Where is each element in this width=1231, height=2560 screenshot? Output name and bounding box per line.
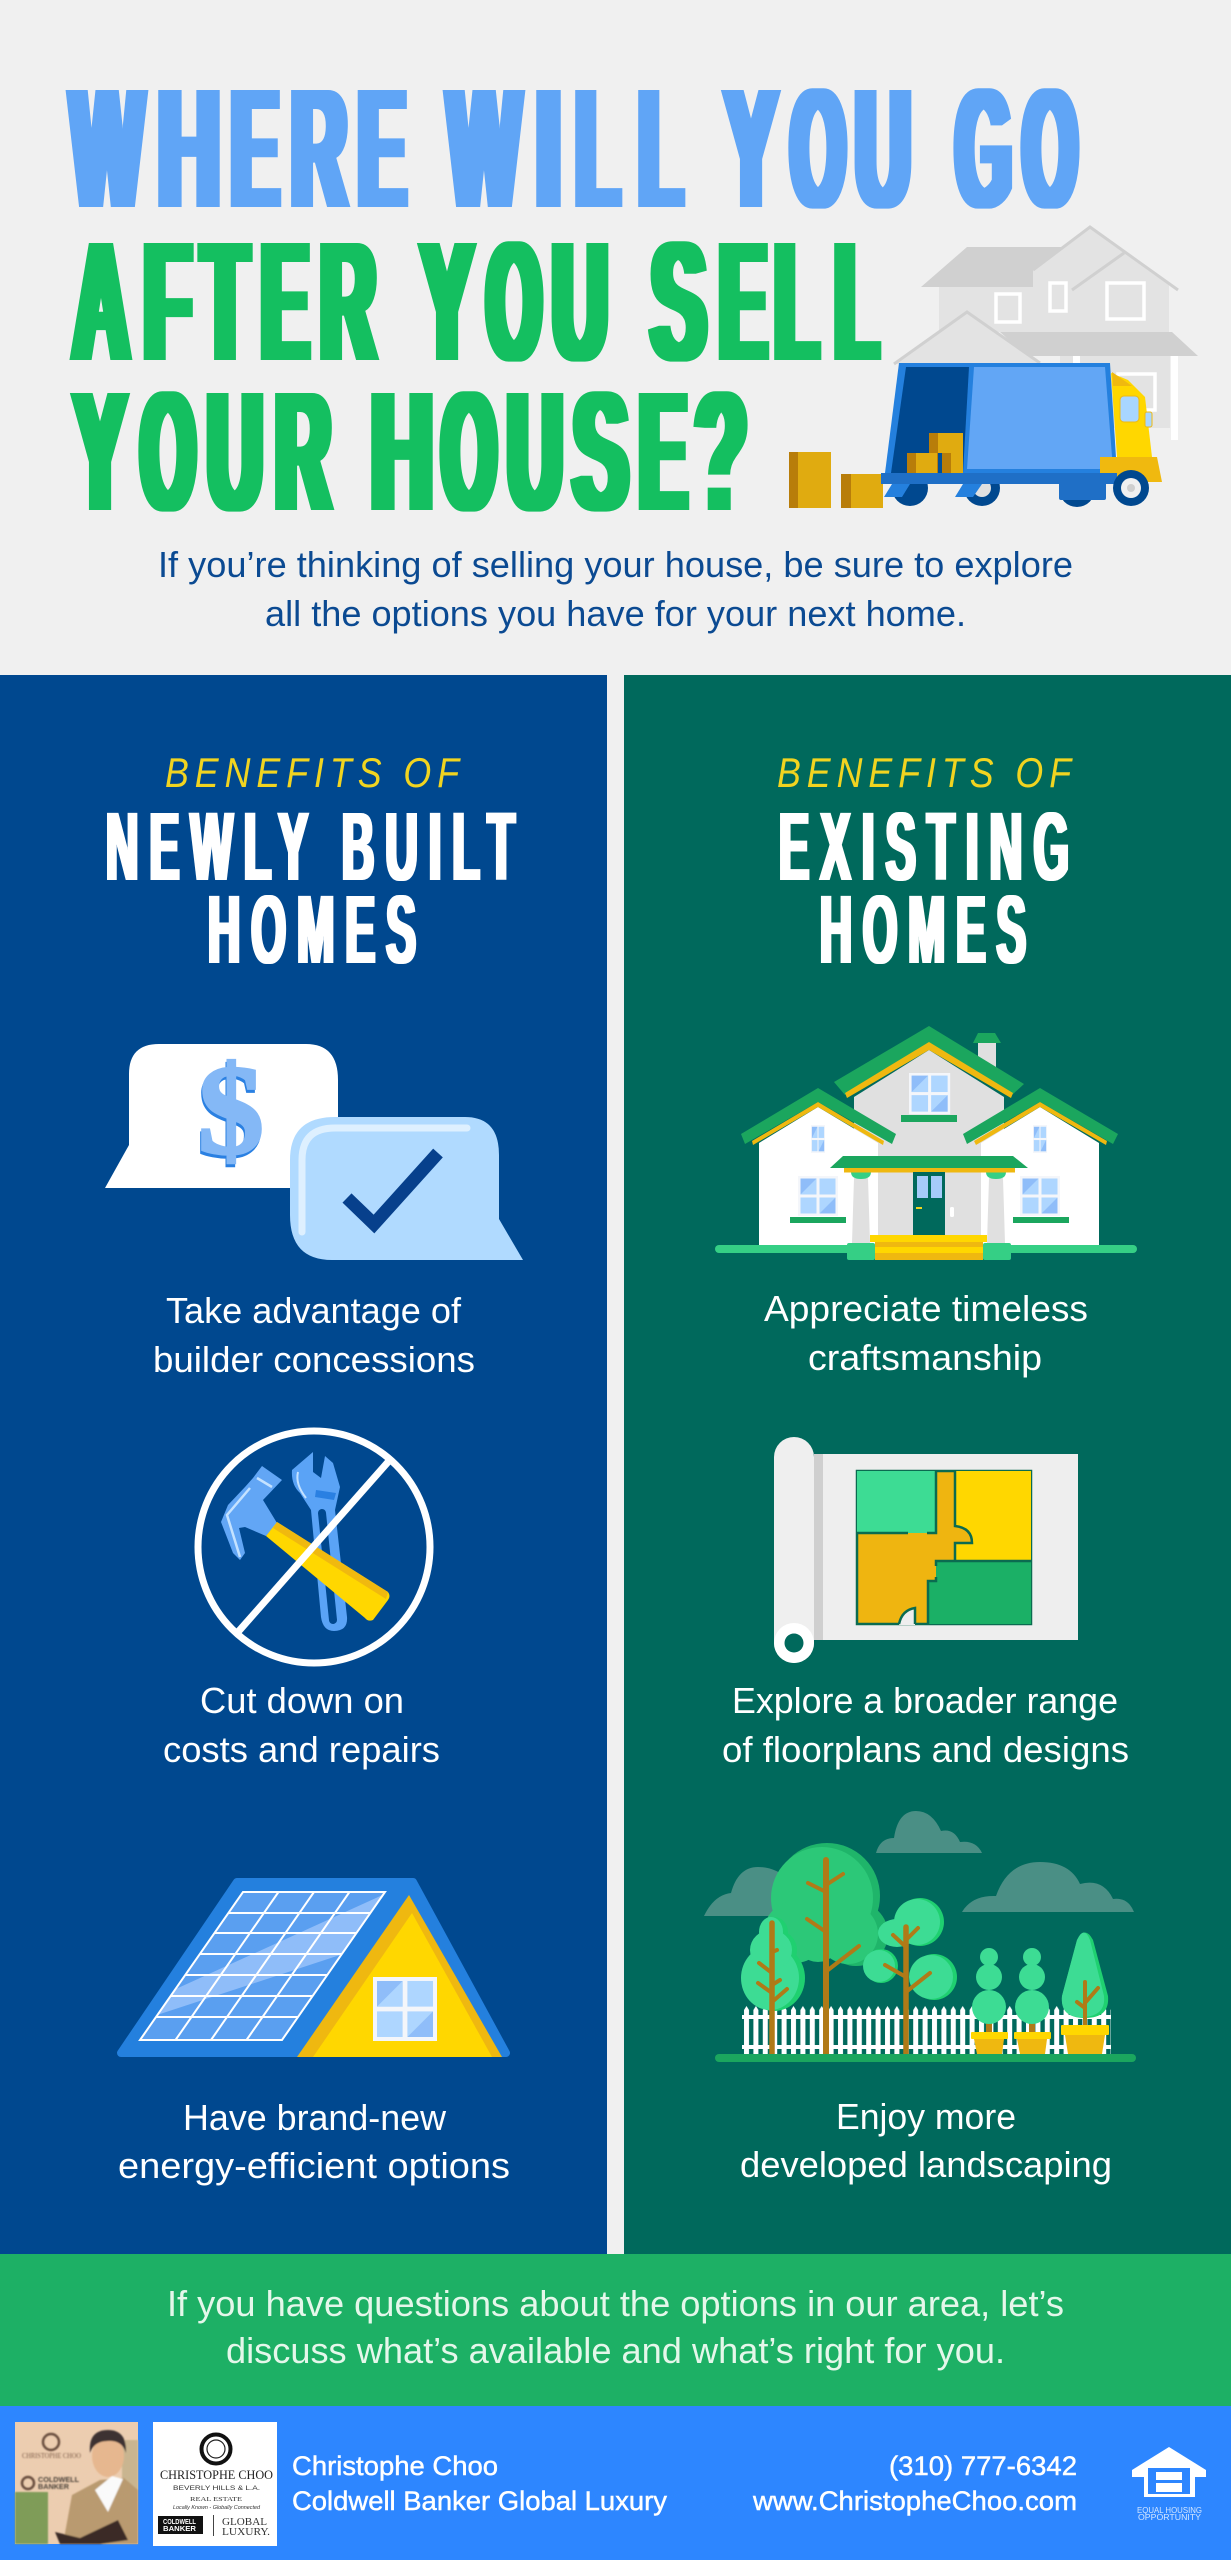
caption: developed landscaping: developed landscaping — [740, 2144, 1112, 2185]
loose moving boxes — [789, 452, 883, 508]
title line 3: O — [141, 357, 195, 547]
background house — [894, 227, 1198, 440]
title line 1: E — [232, 54, 278, 244]
agent logo card: Locally Known - Globally Connected — [173, 2505, 261, 2511]
title line 3: U — [208, 357, 262, 547]
title line 1: G — [956, 54, 1011, 244]
title line 2: A — [73, 207, 129, 397]
panel: newly built homes — [0, 675, 607, 2254]
title line 3: R — [276, 357, 330, 547]
agent photo — [15, 2422, 138, 2544]
phone and website: (310) 777-6342 — [889, 2451, 1077, 2481]
title line 1: R — [292, 54, 346, 244]
caption: timeless craftsmanship: Appreciate timeless — [764, 1288, 1088, 1329]
agent name and company — [292, 2451, 668, 2516]
title — [71, 54, 1077, 547]
icon: landscaped garden — [704, 1811, 1136, 2062]
panel heading: existing: BENEFITS OF — [777, 749, 1077, 796]
icon: floorplan blueprint — [774, 1437, 1078, 1663]
icon: equal housing opportunity: EQUAL HOUSING — [1137, 2505, 1202, 2515]
illustration: moving truck in front of house — [789, 227, 1198, 508]
panel heading: existing — [777, 749, 1080, 984]
title line 2: E — [720, 207, 766, 397]
intro text: If you’re thinking of selling your house, be sure to explore — [158, 544, 1073, 585]
icon: craftsman house — [715, 1026, 1137, 1260]
title line 2: R — [320, 207, 376, 397]
agent logo card — [153, 2422, 277, 2546]
panel: existing homes — [624, 675, 1231, 2254]
truck — [881, 363, 1162, 507]
panel heading: newly built: BENEFITS OF — [165, 749, 465, 796]
title line 1: U — [856, 54, 910, 244]
title line 1: L — [576, 54, 619, 244]
title line 1: H — [158, 54, 220, 244]
potted topiaries — [971, 1932, 1109, 2054]
caption: costs and repairs — [163, 1680, 440, 1770]
title line 1: Y — [725, 54, 777, 244]
caption: floorplans and designs — [722, 1680, 1129, 1770]
agent name and company: Coldwell Banker Global Luxury — [292, 2486, 668, 2516]
title line 3: H — [371, 357, 433, 547]
clouds — [704, 1811, 1134, 1916]
call to action band: If you have questions about the options in our area, let’s — [167, 2283, 1064, 2324]
caption: timeless craftsmanship: craftsmanship — [808, 1337, 1042, 1378]
panel heading: newly built — [106, 749, 526, 984]
call to action band: discuss what’s available and what’s right for you. — [226, 2330, 1005, 2371]
text: O — [1023, 54, 1077, 244]
title line 3 — [74, 357, 747, 547]
middle tree canopy — [863, 1898, 957, 2000]
title line 2: F — [144, 207, 191, 397]
panel: newly built homes: NEWLY BUILT — [106, 792, 526, 901]
icon: speech bubbles with dollar and check: $ — [198, 1039, 264, 1181]
caption: costs and repairs: costs and repairs — [163, 1729, 440, 1770]
panel heading: newly built: HOMES — [208, 875, 427, 984]
caption: floorplans and designs: Explore a broader range — [732, 1680, 1118, 1721]
icon: solar panel roof — [121, 1882, 506, 2057]
call to action band — [0, 2254, 1231, 2406]
title line 2: O — [487, 207, 541, 397]
title line 3: O — [442, 357, 496, 547]
left tree canopy — [741, 1917, 805, 2011]
agent name and company: Christophe Choo — [292, 2451, 498, 2481]
agent logo card: REAL ESTATE — [190, 2496, 242, 2503]
title line 2: S — [651, 207, 706, 397]
title line 2: Y — [421, 207, 473, 397]
caption: floorplans and designs: of floorplans and designs — [722, 1729, 1129, 1770]
caption: energy-efficient options: Have brand-new — [183, 2097, 447, 2138]
agent logo card: BEVERLY HILLS & L.A. — [173, 2485, 260, 2492]
title line 1: I — [536, 54, 562, 244]
title line 3: S — [573, 357, 628, 547]
title line 2: T — [202, 207, 248, 397]
title line 3: U — [508, 357, 562, 547]
agent logo card: CHRISTOPHE CHOO — [160, 2467, 273, 2482]
icon: equal housing opportunity — [1132, 2447, 1206, 2522]
title line 2 — [73, 207, 878, 397]
agent logo card: LUXURY. — [222, 2526, 270, 2538]
caption: builder concessions — [153, 1290, 475, 1380]
title line 3: E — [640, 357, 686, 547]
caption: timeless craftsmanship — [764, 1288, 1088, 1378]
phone and website: www.ChristopheChoo.com — [752, 2486, 1077, 2516]
footer bar — [0, 2406, 1231, 2560]
title line 2: U — [552, 207, 608, 397]
icon: no tools — [198, 1431, 430, 1663]
title line 3: ? — [695, 357, 747, 547]
agent logo card: COLDWELL — [163, 2519, 197, 2526]
title line 2: L — [775, 207, 818, 397]
title line 1: W — [71, 54, 143, 244]
agent logo card: GLOBAL — [222, 2516, 267, 2528]
title line 1: L — [639, 54, 682, 244]
caption: developed landscaping — [740, 2096, 1112, 2185]
icon: speech bubbles with dollar and check — [105, 1039, 523, 1260]
title line 1 — [71, 54, 1077, 244]
title line 1: O — [791, 54, 845, 244]
caption: builder concessions: builder concessions — [153, 1339, 475, 1380]
phone and website — [752, 2451, 1077, 2516]
picket fence — [742, 2006, 1111, 2054]
icon: speech bubbles with dollar and check: $ — [197, 1042, 263, 1184]
agent photo: COLDWELL — [38, 2477, 80, 2484]
caption: builder concessions: Take advantage of — [166, 1290, 462, 1331]
title line 2: E — [262, 207, 308, 397]
icon: equal housing opportunity: OPPORTUNITY — [1138, 2512, 1201, 2522]
intro text — [158, 544, 1073, 634]
big tree canopy — [764, 1843, 888, 1966]
agent photo: BANKER — [38, 2484, 69, 2491]
caption: energy-efficient options — [118, 2097, 510, 2186]
title line 3: Y — [74, 357, 126, 547]
title line 1: W — [448, 54, 520, 244]
title line 1: E — [358, 54, 406, 244]
tree trunks and branches — [758, 1860, 930, 2054]
caption: energy-efficient options: energy-efficient options — [118, 2145, 510, 2186]
caption: costs and repairs: Cut down on — [200, 1680, 404, 1721]
title: L — [835, 207, 878, 397]
intro text: all the options you have for your next home. — [265, 593, 966, 634]
agent photo: CHRISTOPHE CHOO — [22, 2452, 81, 2460]
agent logo card: BANKER — [163, 2526, 196, 2533]
caption: developed landscaping: Enjoy more — [836, 2096, 1016, 2137]
